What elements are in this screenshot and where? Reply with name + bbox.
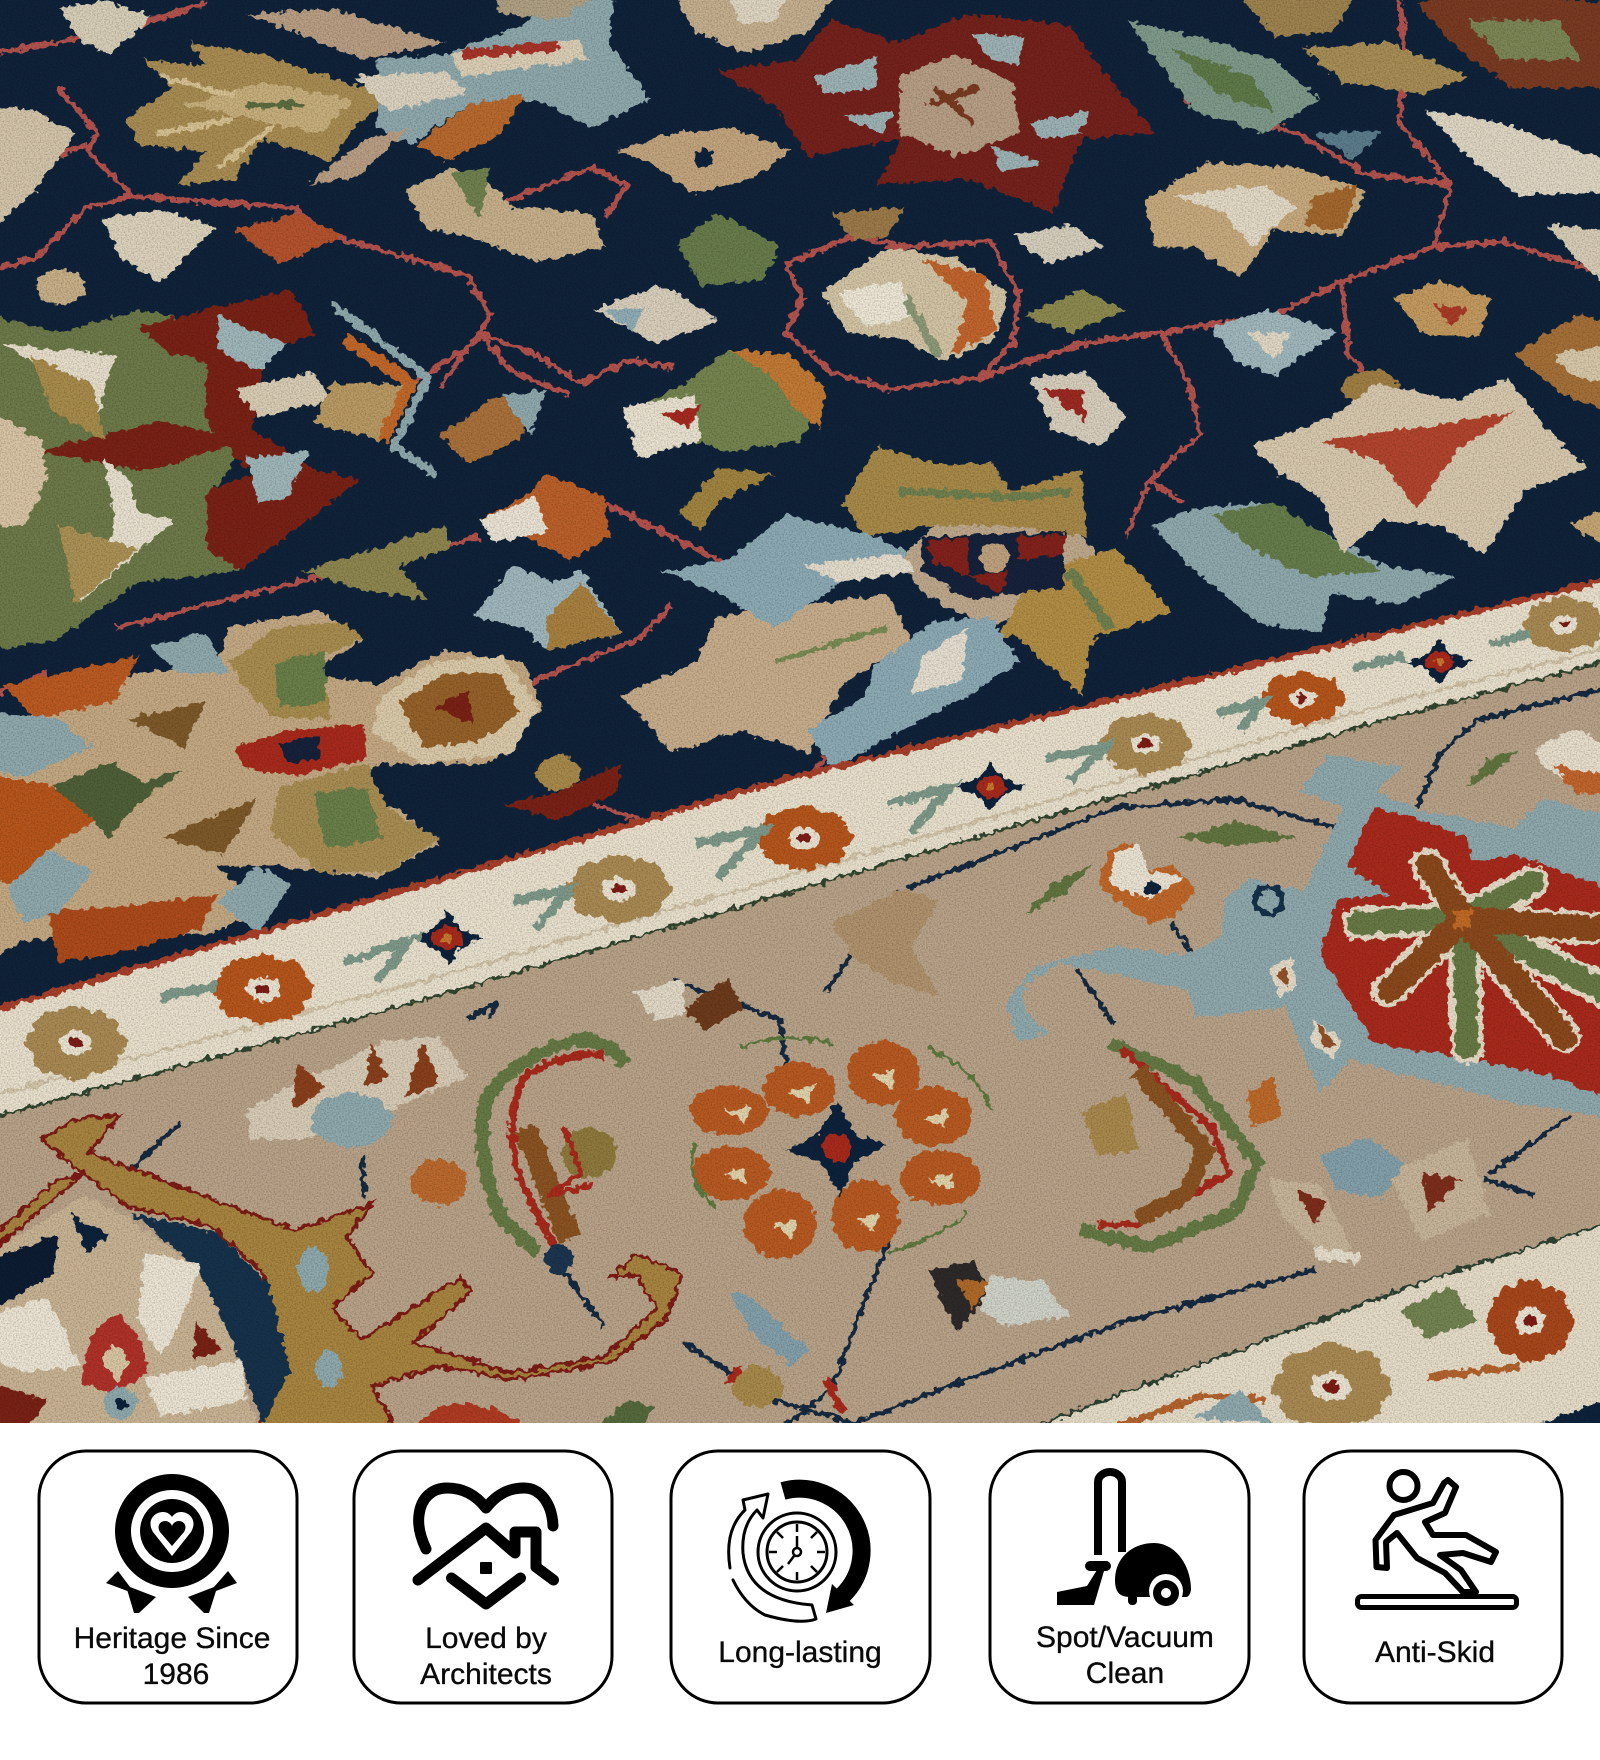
motif: lower-left palmette [0, 611, 621, 963]
card: Spot/Vacuum Clean [990, 1451, 1249, 1703]
label: Spot/Vacuum [1036, 1621, 1214, 1654]
icon: medal with heart [106, 1474, 237, 1613]
motif: orange flower and blue sprig [303, 469, 774, 650]
panel: cream guard border [0, 579, 1600, 1120]
label [74, 1622, 270, 1691]
motif: right red-cream leaf [1252, 378, 1587, 554]
card: Long-lasting [671, 1451, 930, 1703]
card: Heritage Since 1986 [39, 1451, 297, 1703]
motif: left paisley [412, 1040, 626, 1273]
label [1036, 1621, 1214, 1690]
motif: small taupe band details [411, 889, 1490, 1432]
motif: gold corner arch [0, 1115, 682, 1433]
label: Loved by [425, 1622, 547, 1655]
label: 1986 [143, 1658, 209, 1691]
motif: cream green orange flower [623, 349, 826, 457]
navy thin border vines [130, 687, 1600, 1425]
motif: left top flower and leaves [0, 1, 343, 304]
label: Anti-Skid [1375, 1636, 1495, 1669]
icon: vacuum cleaner [1057, 1472, 1191, 1608]
card: Anti-Skid [1304, 1451, 1562, 1703]
label [420, 1622, 552, 1691]
motif: cream flower with blue bud [246, 1037, 468, 1147]
lower cream band flowers [1104, 1279, 1574, 1432]
motif: large central palmette [621, 446, 1172, 770]
motif: centre flower in vine loop [820, 247, 1007, 361]
motif: upper-right leaves [1127, 0, 1600, 287]
motif: top-left palmette [127, 0, 649, 185]
carpet vines [0, 0, 1600, 827]
motif: top red medallion [672, 0, 1155, 213]
label: Architects [420, 1658, 552, 1691]
motif: large left green palmette [0, 289, 436, 650]
icon: clock with arrows [729, 1489, 862, 1621]
motif: main orange flower [690, 1038, 990, 1258]
label: Clean [1086, 1657, 1164, 1690]
motif: blue-green right leaf [1152, 503, 1456, 633]
icon: slipping person [1358, 1472, 1516, 1608]
icon: heart and house [418, 1488, 554, 1604]
label: Heritage Since [74, 1622, 270, 1655]
panel: taupe main border [0, 662, 1600, 1432]
motif: small field flowers [405, 128, 1600, 548]
motif: blue and red corner medallion [1006, 730, 1600, 1119]
motif: tulip and small border leaves [1024, 821, 1297, 923]
card: Loved by Architects [354, 1451, 612, 1703]
label: Long-lasting [718, 1636, 882, 1669]
